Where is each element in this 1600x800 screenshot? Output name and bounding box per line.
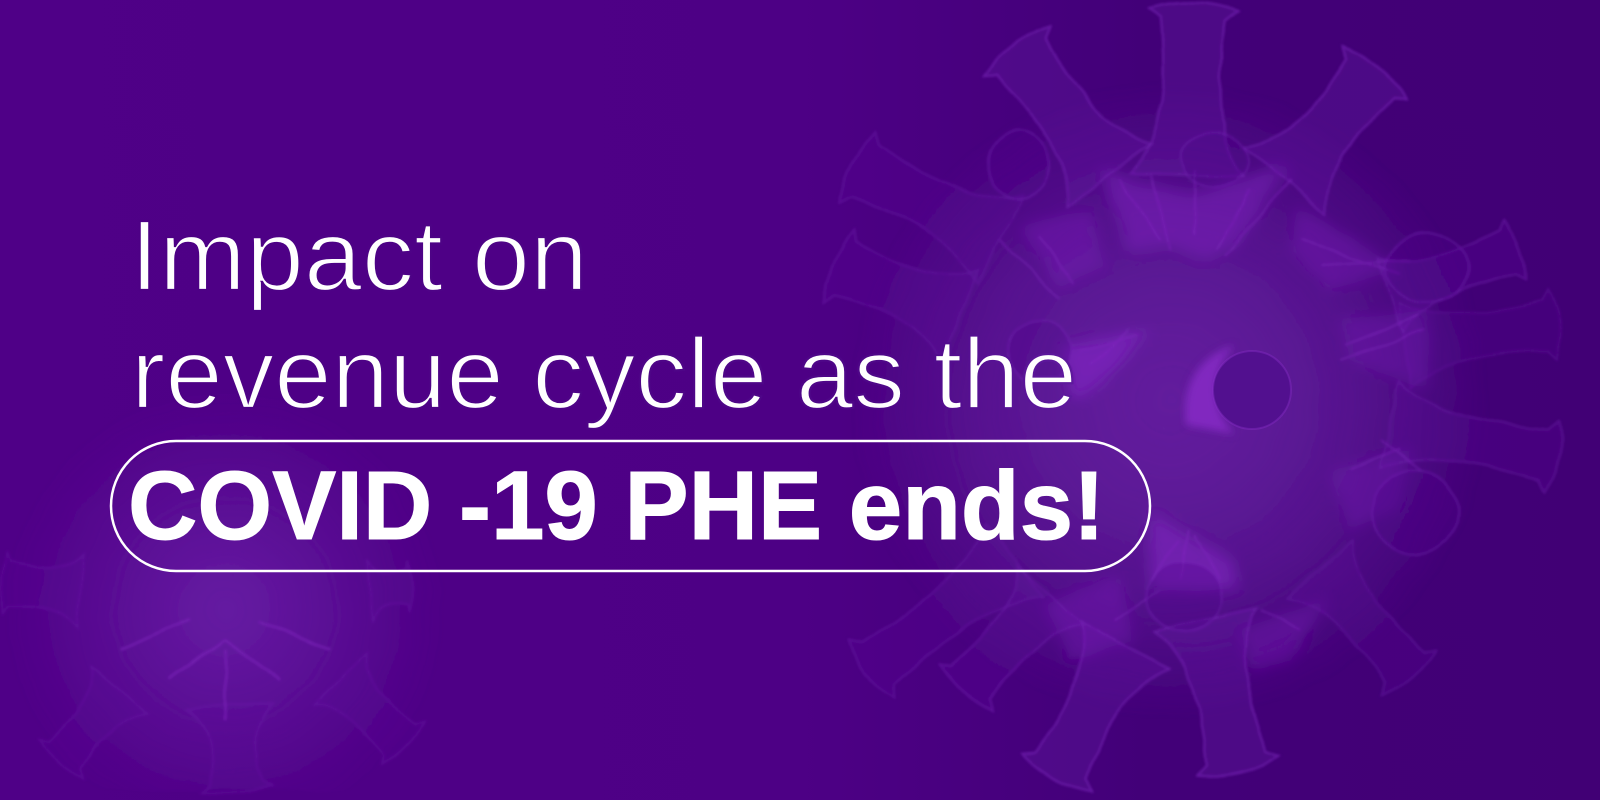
bright crescent [1185,345,1235,434]
hole [1213,351,1291,429]
virus: large, right [815,1,1568,800]
small virus spikes [0,546,433,797]
title line 1: Impact on [130,200,588,312]
virus body [850,80,1490,720]
small virus fibres [120,620,330,720]
feathered fibres [1000,170,1425,630]
small virus glow [5,390,445,790]
virus opening: central hole [1185,345,1291,434]
highlight pill [111,441,1150,571]
virus: small, bottom left [0,390,445,797]
virus capsule rings [989,131,1469,632]
title [111,200,1150,571]
virus spikes [815,1,1568,800]
title line 3: COVID -19 PHE ends! [128,451,1105,560]
title line 2: revenue cycle as the [131,318,1077,430]
body highlights [1020,165,1430,670]
